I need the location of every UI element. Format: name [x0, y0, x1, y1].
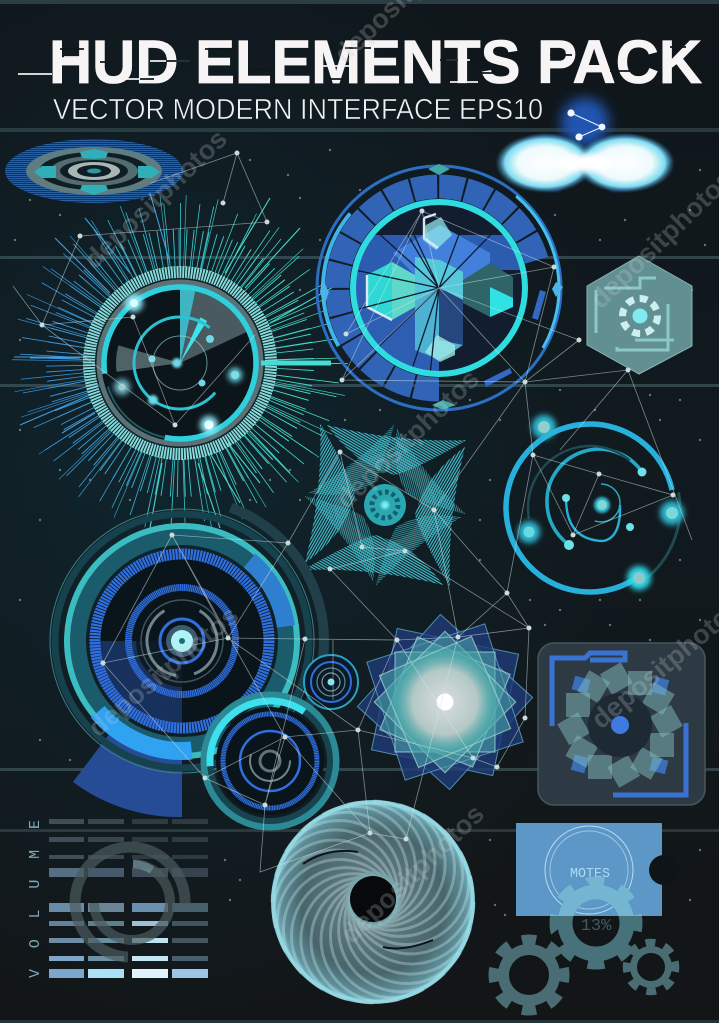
rounded control panel	[538, 643, 705, 805]
radar wedges	[90, 273, 270, 453]
ellipse radar top left	[5, 139, 183, 203]
star field dots	[15, 150, 705, 915]
title: HUD ELEMENTS PACK	[49, 28, 702, 96]
circle marks	[428, 164, 455, 410]
notes panel	[516, 823, 679, 916]
network constellation lines	[13, 153, 692, 872]
wedge below dial	[73, 733, 182, 817]
medium dial	[204, 695, 336, 827]
dial hub	[166, 625, 198, 657]
teal squares	[374, 631, 516, 773]
rim ticks	[89, 272, 271, 454]
subtitle: VECTOR MODERN INTERFACE EPS10	[53, 94, 543, 126]
watermarks: depositphotos	[78, 124, 233, 274]
orbit diagram	[474, 392, 706, 624]
volume bars	[49, 819, 208, 978]
small target dial	[304, 655, 358, 709]
big blue circle	[316, 164, 563, 412]
gear: large	[547, 874, 645, 972]
dark halo ring	[341, 461, 429, 549]
watermarks: depositphotos	[83, 600, 244, 743]
watermarks: depositphotos	[330, 364, 485, 514]
dark hole	[345, 871, 401, 927]
orbit nodes	[518, 415, 684, 590]
volume label: VOLUME	[27, 820, 44, 978]
radar glow nodes	[114, 294, 242, 434]
sunburst radar	[14, 193, 340, 528]
gear percent label: 13%	[581, 917, 612, 936]
corner brackets	[552, 653, 625, 726]
star blades	[296, 416, 474, 594]
sunburst rays	[48, 231, 312, 495]
orbit arcs	[474, 392, 706, 624]
lace star	[296, 416, 474, 594]
right bar	[261, 360, 331, 366]
hexagon cube inside circle	[354, 205, 520, 375]
notes panel: MOTES	[570, 866, 610, 882]
big circular dial	[0, 459, 364, 823]
pale core	[395, 652, 495, 752]
flower polygon	[357, 614, 533, 790]
spiral sphere	[255, 784, 491, 1020]
pinwheel	[557, 662, 683, 788]
hexagon emblem	[587, 256, 692, 374]
blue squares	[357, 614, 533, 790]
watermarks: depositphotos	[335, 799, 490, 949]
volume gauge arcs	[75, 847, 185, 957]
gear overlap on panel	[550, 876, 642, 916]
gear: right	[622, 938, 680, 996]
swirl strokes	[255, 784, 491, 1020]
dial rings	[0, 459, 364, 823]
butterfly glow with constellation	[495, 98, 675, 193]
gear: left	[487, 933, 571, 1017]
center ball	[364, 484, 406, 526]
